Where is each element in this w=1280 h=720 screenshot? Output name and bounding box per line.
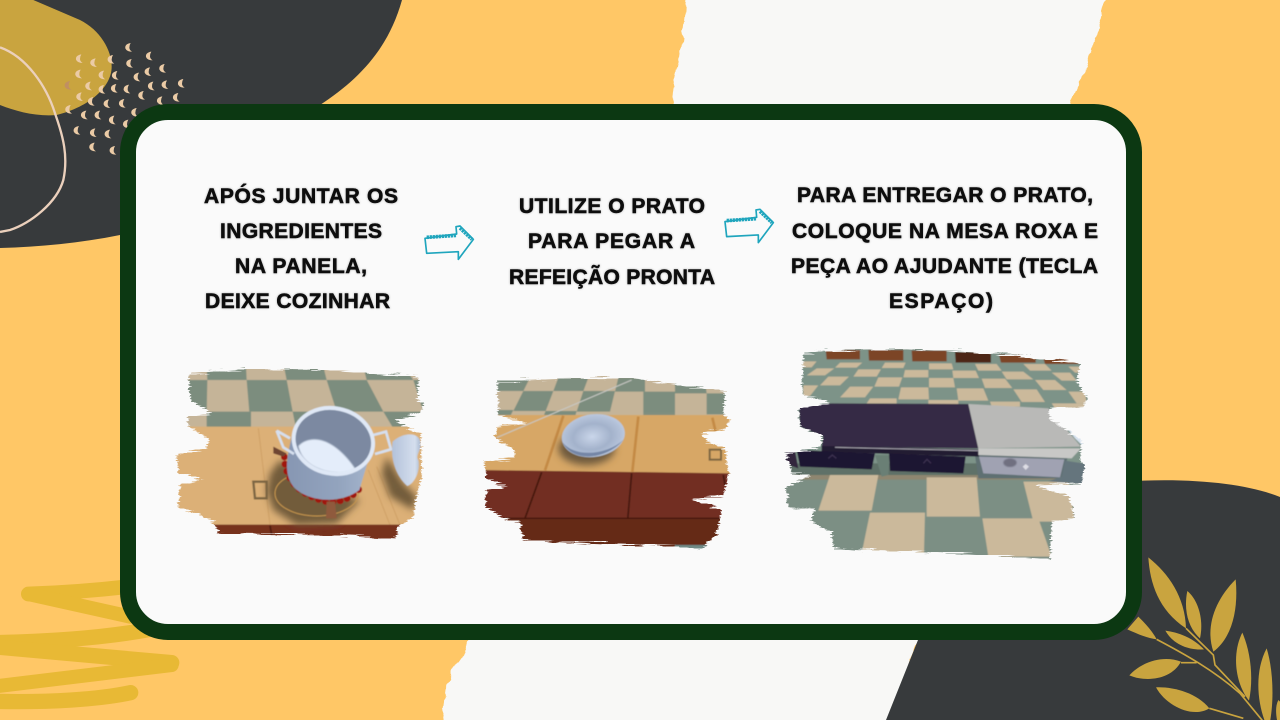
image: pot on the stove <box>175 367 424 539</box>
dark blob top left <box>0 0 402 248</box>
text: step 3: ESPAÇO) <box>889 290 993 313</box>
text: step 2: UTILIZE O PRATO <box>519 195 705 218</box>
text: step 3 <box>791 184 1098 313</box>
arrow 1 <box>425 226 473 259</box>
text: step 1: DEIXE COZINHAR <box>205 290 390 313</box>
main card with green border <box>128 112 1134 632</box>
text: step 3: PARA ENTREGAR O PRATO, <box>797 184 1093 207</box>
text: step 2: PARA PEGAR A <box>528 230 695 253</box>
dark blob bottom right <box>886 480 1280 720</box>
image: purple delivery table <box>784 348 1088 560</box>
text: step 1: INGREDIENTES <box>220 220 382 243</box>
arrow 2 <box>725 209 773 243</box>
text: step 2 <box>509 195 715 289</box>
torn paper strip <box>440 0 1110 720</box>
text: step 1 <box>204 184 398 313</box>
gold blob with pink line and crescent dots <box>0 0 185 232</box>
image: plate on the counter <box>483 376 732 550</box>
yellow scribble <box>0 586 172 702</box>
text: step 2: REFEIÇÃO PRONTA <box>509 266 715 289</box>
text: step 1: APÓS JUNTAR OS <box>204 184 398 208</box>
text: step 3: COLOQUE NA MESA ROXA E <box>792 220 1098 243</box>
text: step 1: NA PANELA, <box>235 255 367 278</box>
text: step 3: PEÇA AO AJUDANTE (TECLA <box>791 255 1098 278</box>
gold leaves branch <box>1127 557 1280 720</box>
